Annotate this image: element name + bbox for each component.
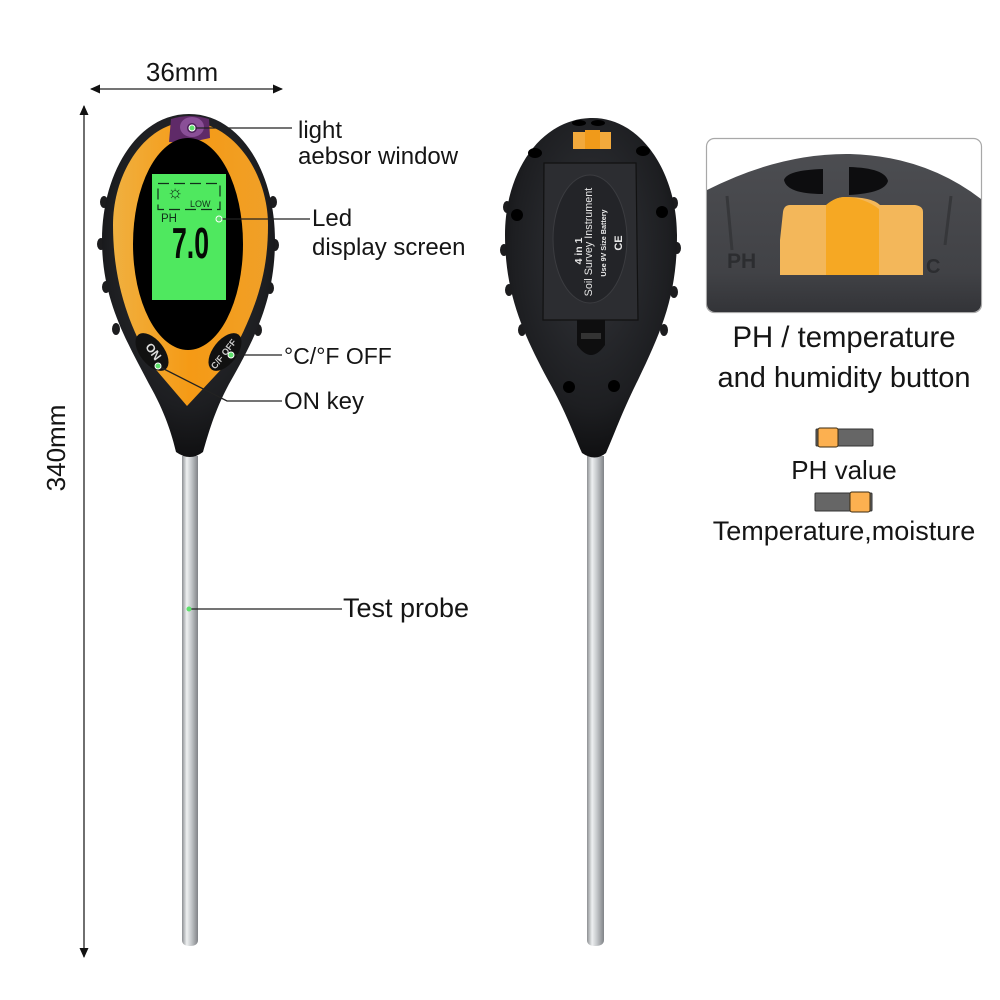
- front view of soil meter: [97, 114, 279, 946]
- LCD screen: PH: [161, 213, 177, 225]
- side grips: [97, 196, 279, 336]
- back side grips: [500, 197, 681, 336]
- callout: ON key: [155, 363, 364, 415]
- PH value switch legend: [791, 428, 897, 485]
- width dimension: 36mm: [90, 57, 283, 94]
- caption: switch: [717, 321, 971, 394]
- detail panel vents: [784, 167, 888, 195]
- battery cover label: Use 9V Size Battery: [599, 209, 608, 277]
- height dimension: 340mm: 340mm: [41, 405, 71, 491]
- battery cover label: CE: [613, 235, 625, 251]
- back probe shaft: [587, 456, 604, 946]
- detail panel switch: [780, 197, 923, 275]
- detail panel PH marking: PH: [727, 250, 756, 273]
- detail panel grooves: [727, 196, 951, 250]
- back orange switch: [573, 130, 611, 149]
- light sensor window: [169, 116, 210, 142]
- ON button: [129, 327, 175, 377]
- unit button: [202, 327, 248, 377]
- detail panel C marking: C: [926, 256, 940, 278]
- detail panel: switch close-up: [706, 138, 982, 312]
- battery latch: [577, 320, 605, 355]
- LCD screen: 7.0: [172, 219, 209, 268]
- caption: switch: and humidity button: [717, 362, 971, 394]
- back view of soil meter: [500, 118, 681, 946]
- width dimension: 36mm: 36mm: [146, 57, 218, 87]
- callout: LED display: display screen: [312, 234, 465, 261]
- label oval: [553, 175, 627, 303]
- LCD screen: ☼: [167, 182, 183, 202]
- callout: LED display: [216, 205, 465, 261]
- temperature and moisture switch legend: Temperature,moisture: [713, 516, 975, 546]
- caption: switch: PH / temperature: [732, 321, 956, 354]
- temperature and moisture switch legend: [713, 492, 975, 546]
- battery cover label: 4 in 1: [573, 237, 585, 264]
- meter body: [102, 114, 275, 457]
- unit button: C/F OFF: [209, 337, 239, 371]
- callout: ON key: ON key: [284, 388, 364, 415]
- PH value switch legend: PH value: [791, 455, 897, 485]
- back body: [505, 118, 677, 458]
- battery cover label: Soil Survey Instrument: [583, 188, 595, 296]
- test probe shaft: [182, 456, 198, 946]
- callout: unit and off key: °C/°F OFF: [284, 343, 392, 369]
- battery cover: [543, 163, 638, 320]
- callout: test probe: Test probe: [343, 593, 469, 623]
- callout: light sensor window: light: [298, 117, 342, 144]
- battery cover label: [573, 188, 625, 296]
- LCD screen: [152, 174, 226, 300]
- callout: unit and off key: [228, 343, 392, 369]
- detail panel housing: [707, 154, 981, 312]
- height dimension: 340mm: [41, 105, 88, 958]
- back vent slots: [511, 120, 668, 393]
- callout: test probe: [186, 593, 469, 623]
- callout: light sensor window: aebsor window: [298, 143, 459, 170]
- LCD screen: LOW: [190, 199, 211, 209]
- orange faceplate: [113, 122, 268, 406]
- callout: light sensor window: [189, 117, 459, 170]
- LCD bezel: [133, 138, 243, 350]
- ON button: ON: [142, 340, 164, 363]
- callout: LED display: Led: [312, 205, 352, 232]
